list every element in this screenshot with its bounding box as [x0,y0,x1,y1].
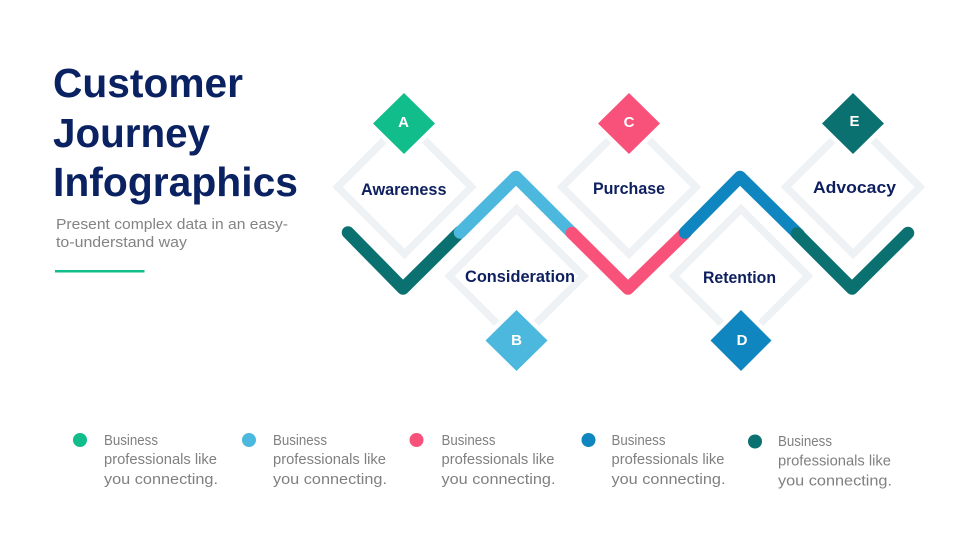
legend item 3: you connecting. [442,472,556,488]
legend item 5: you connecting. [778,474,892,490]
legend item 2: professionals like [273,452,386,468]
legend item 2: you connecting. [273,472,387,488]
badge C [598,93,660,154]
panel: retention outline [674,209,808,343]
badge A: A [398,114,409,131]
subtitle [56,216,288,251]
subtitle: to-understand way [56,234,188,251]
legend item 1: Business [104,433,158,449]
label: Retention: Retention [703,269,776,287]
panel: consideration outline [450,209,584,343]
title: Infographics [53,159,298,205]
legend item 5: professionals like [778,454,891,470]
title: Journey [53,110,210,156]
legend item 4: you connecting. [612,472,726,488]
label: Advocacy: Advocacy [813,179,897,197]
accent rule [55,270,144,272]
legend item 3 [410,433,556,488]
legend item 1: professionals like [104,452,217,468]
badge B: B [511,332,522,349]
badge B [486,310,548,371]
badge A [373,93,435,154]
title: Customer [53,60,243,106]
label: Consideration: Consideration [465,268,575,286]
badge D: D [737,332,748,349]
legend item 5: Business [778,434,832,450]
badge C: C [624,114,635,131]
legend item 4: Business [612,433,666,449]
legend item 4 [582,433,726,488]
label: Awareness: Awareness [361,181,446,199]
zigzag journey line [348,177,908,288]
legend item 1: you connecting. [104,472,218,488]
label: Purchase: Purchase [593,180,665,198]
panel: advocacy outline [786,120,920,254]
legend item 2 [242,433,387,488]
subtitle: Present complex data in an easy- [56,216,288,233]
panel: purchase outline [562,120,696,254]
legend item 5 [748,434,892,490]
badge E [822,93,884,154]
title [53,60,298,205]
legend item 3: professionals like [442,452,554,468]
badge E: E [849,113,860,130]
legend item 2: Business [273,433,327,449]
panel: awareness outline [338,120,472,254]
legend item 1 [73,433,218,488]
legend item 4: professionals like [612,452,724,468]
badge D [710,310,772,371]
legend item 3: Business [442,433,496,449]
